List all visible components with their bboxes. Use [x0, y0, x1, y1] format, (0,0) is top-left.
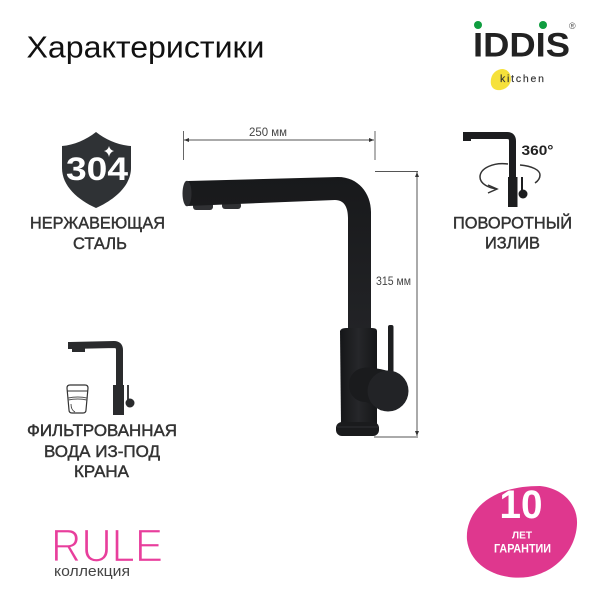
panel: swivel spout: [453, 132, 577, 252]
label: stainless steel: НЕРЖАВЕЮЩАЯ: [30, 214, 165, 232]
warranty badge: [467, 483, 577, 578]
dimension: height 315 mm: 315 мм: [376, 274, 411, 288]
logo: IDDIS kitchen: IDDIS: [473, 26, 570, 64]
handle: [349, 367, 388, 411]
icon: shield 304: 304: [66, 151, 128, 187]
warranty badge: 10: [500, 483, 542, 527]
label: swivel spout: ИЗЛИВ: [485, 234, 540, 252]
lever: [388, 325, 394, 377]
label: stainless steel: СТАЛЬ: [73, 235, 127, 253]
warranty badge: ЛЕТ: [512, 530, 533, 542]
label: filtered water: ФИЛЬТРОВАННАЯ: [27, 422, 177, 440]
label: swivel spout: ПОВОРОТНЫЙ: [453, 214, 572, 232]
base: [336, 422, 379, 436]
logo: IDDIS kitchen: [473, 21, 576, 90]
panel: filtered water: [27, 342, 182, 481]
faucet illustration: [182, 177, 408, 436]
collection label: RULE: [51, 520, 163, 572]
dimension: height 315 mm: [374, 172, 419, 437]
dimension: width 250 mm: 250 мм: [249, 125, 287, 139]
body: [340, 328, 377, 424]
warranty badge: ГАРАНТИИ: [494, 544, 551, 556]
title: Характеристики: [26, 30, 264, 64]
aerator knobs: [193, 202, 213, 210]
collection label: коллекция: [54, 563, 130, 580]
label: filtered water: КРАНА: [74, 463, 129, 481]
icon: filter faucet and glass: [67, 342, 134, 415]
icon: swivel faucet 360: 360°: [522, 142, 554, 158]
logo: IDDIS kitchen: kitchen: [500, 73, 544, 85]
panel: stainless steel 304: [30, 132, 170, 253]
dimension: width 250 mm: [184, 125, 375, 160]
label: filtered water: ВОДА ИЗ-ПОД: [44, 443, 160, 461]
spout: [188, 177, 371, 330]
logo: IDDIS kitchen: ®: [569, 21, 576, 31]
